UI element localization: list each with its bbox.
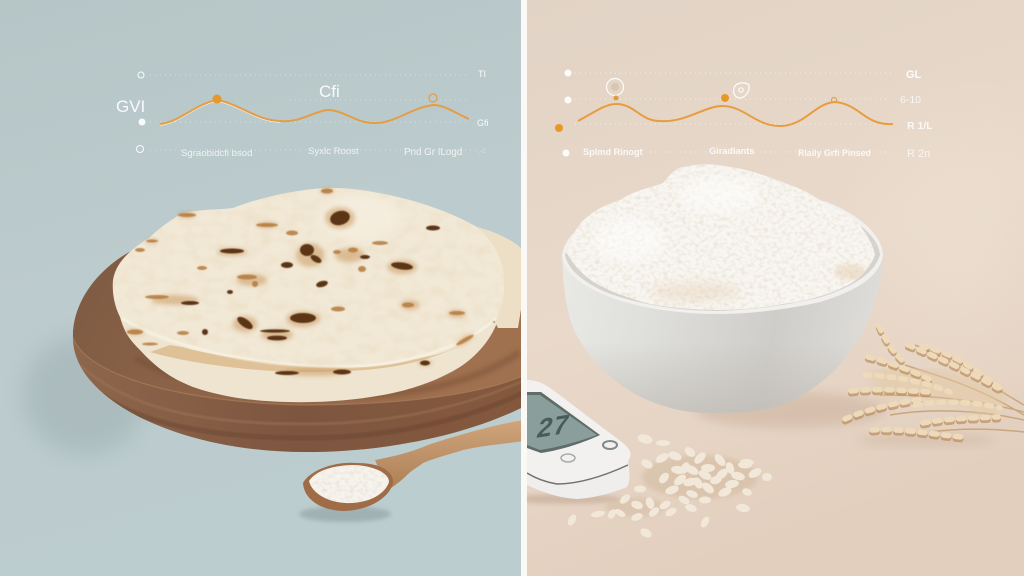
back layer (477, 227, 521, 328)
curve labels: R 1/L (907, 120, 933, 132)
left axis markers (136, 72, 146, 152)
bowl shadow (695, 392, 885, 428)
white bowl (562, 193, 883, 413)
panel: rice side (510, 0, 1024, 576)
curve labels (116, 69, 489, 159)
icon: berry (734, 83, 749, 98)
lower layer (120, 317, 496, 402)
curve line (160, 94, 469, 125)
curve labels: Syxlc Roost (308, 146, 359, 157)
curve labels: Rlaily Grfi Pinsed (798, 148, 871, 158)
scattered rice grains (566, 433, 772, 539)
curve labels: GVI (116, 97, 145, 116)
meter shadow (510, 494, 620, 504)
curve labels: Cfi (319, 82, 340, 101)
rice stalks (845, 326, 1024, 440)
curve labels: 6-10 (900, 94, 921, 106)
wheat shadow (855, 434, 995, 446)
char spot halos (126, 188, 475, 376)
flatbread (113, 188, 523, 402)
curve labels: R 2n (907, 148, 930, 160)
char spots (181, 209, 440, 375)
upper layer (113, 188, 504, 367)
curve labels: Giradlants (709, 146, 754, 156)
curve labels: ⸝c (478, 146, 486, 155)
divider (521, 0, 527, 576)
curve labels: GL (906, 69, 922, 81)
icon: grain circle (606, 78, 624, 100)
glucose meter (527, 380, 631, 499)
meter screen (527, 395, 597, 450)
rice mound (566, 164, 875, 310)
left axis markers (555, 70, 572, 156)
panel: flatbread side (0, 0, 525, 576)
board shadow (23, 335, 147, 455)
curve labels: Gfi (477, 118, 489, 128)
chart: rice glycemic curve (555, 69, 933, 160)
curve labels: Sgraobidcfi bsod (181, 148, 252, 159)
curve labels: Pnd Gr ILogd (404, 147, 462, 158)
wooden board (73, 250, 525, 454)
wooden spoon with rice (303, 420, 523, 511)
curve labels: TI (478, 69, 486, 79)
curve labels (583, 69, 933, 160)
curve line (578, 94, 893, 126)
spoon shadow (299, 506, 391, 522)
chart: flatbread glycemic curve (116, 69, 489, 159)
curve labels: Splmd Rinogt (583, 147, 643, 157)
glucose meter: 27 (533, 411, 572, 447)
